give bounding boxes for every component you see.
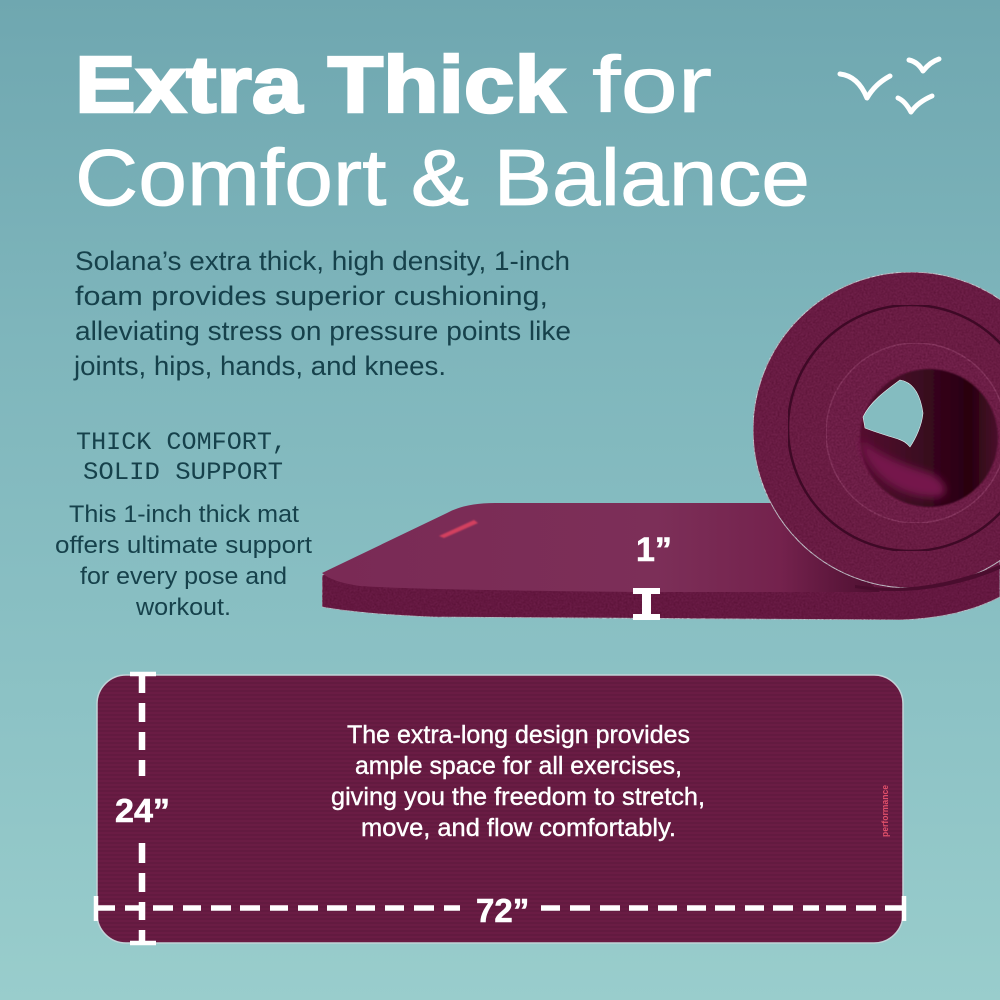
support text: workout.	[135, 594, 231, 621]
rolled mat illustration	[322, 272, 1000, 620]
mat description: move, and flow comfortably.	[361, 814, 676, 842]
thickness label	[633, 531, 672, 620]
middle coil	[788, 305, 1000, 551]
support text: This 1-inch thick mat	[69, 501, 299, 528]
length dimension: 72 inches: 72”	[476, 892, 529, 929]
mat description	[331, 721, 705, 842]
intro text: Solana’s extra thick, high density, 1-inch	[75, 246, 570, 276]
title: Extra Thick	[75, 40, 566, 129]
length dimension: 72 inches	[96, 892, 904, 929]
outer coil	[753, 272, 1000, 588]
intro text: foam provides superior cushioning,	[75, 281, 548, 311]
intro text: joints, hips, hands, and knees.	[73, 351, 446, 381]
inner coil	[826, 343, 1000, 523]
mat side edge	[322, 540, 1000, 620]
see-through hole	[863, 380, 923, 447]
support text	[55, 501, 312, 621]
inner crescent	[860, 440, 945, 497]
intro text: alleviating stress on pressure points like	[75, 316, 571, 346]
mat description: giving you the freedom to stretch,	[331, 783, 705, 811]
subheading: SOLID SUPPORT	[83, 458, 283, 487]
outer lap under roll	[855, 565, 1000, 591]
icon: birds	[840, 59, 939, 112]
mat logo vertical: performance	[880, 785, 890, 837]
mat description: The extra-long design provides	[347, 721, 690, 749]
mat top face	[322, 503, 880, 592]
title	[75, 40, 810, 222]
title: Comfort & Balance	[75, 133, 810, 222]
intro text	[73, 246, 571, 381]
flat mat panel	[96, 674, 904, 943]
thickness label: 1”	[636, 531, 672, 569]
subheading	[76, 428, 287, 487]
core opening	[860, 369, 998, 507]
width dimension: 24 inches	[115, 674, 170, 943]
width dimension: 24 inches: 24”	[115, 792, 170, 829]
roll	[753, 272, 1000, 588]
support text: for every pose and	[80, 563, 287, 590]
mat description: ample space for all exercises,	[355, 752, 682, 780]
title: for	[592, 40, 712, 129]
support text: offers ultimate support	[55, 532, 312, 559]
mat logo	[439, 520, 478, 538]
subheading: THICK COMFORT,	[76, 428, 287, 457]
thickness marker	[633, 588, 660, 620]
